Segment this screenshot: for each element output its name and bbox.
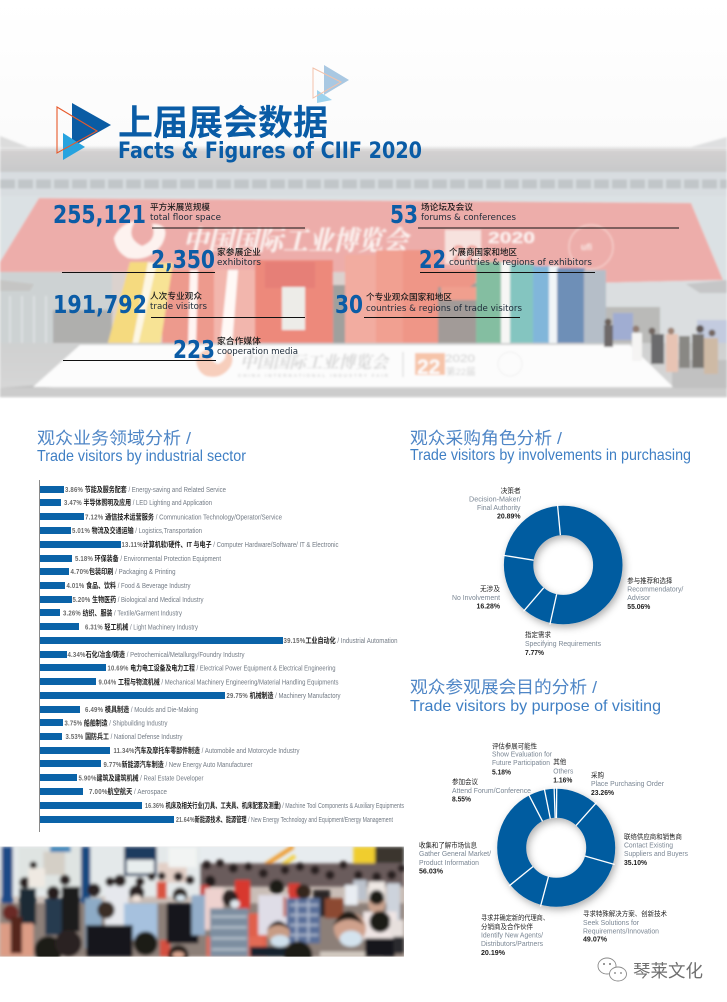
heading: involvements in purchasing: 观众采购角色分析 /: [410, 429, 562, 448]
bar: light machinery: [40, 622, 198, 632]
bar: LED: 3.47% 半导体照明及应用 / LED Lighting and Application: [64, 497, 212, 507]
title: 上届展会数据: [118, 104, 328, 143]
bar: food: 4.01% 食品、饮料 / Food & Beverage Industry: [66, 580, 191, 590]
label: contact suppliers: [624, 832, 688, 867]
stat: forums and conferences: forums & conferences: [421, 213, 517, 223]
lower walls: [0, 272, 112, 348]
label: decision maker: [469, 486, 522, 521]
label: identify new agents: Identify New Agents/: [481, 931, 544, 940]
label: gather market information: Gather General Market/: [419, 849, 492, 858]
label: seek solutions: Seek Solutions for: [583, 918, 639, 927]
platform: fair name and session mark: [196, 348, 522, 379]
label: gather market information: [419, 840, 492, 875]
label: gather market information: 56.03%: [419, 866, 444, 875]
stat: total floor space: 255,121: [53, 200, 146, 229]
bar: logistics: [40, 525, 202, 535]
label: show evaluation: Show Evaluation for: [492, 750, 552, 758]
heading: involvements in purchasing: Trade visitors by involvements in purchasing: [410, 447, 691, 464]
label: recommendatory: [627, 576, 684, 611]
foreground dark people: [34, 936, 62, 964]
stat: countries of trade visitors: [335, 290, 523, 319]
label: show evaluation: Future Participation: [492, 758, 550, 767]
bar: automobile: 11.34%汽车及摩托车零部件制造 / Automobile and Motorcycle Industry: [114, 745, 300, 755]
bar: electrical power: [40, 662, 336, 672]
stat: cooperation media: [63, 335, 298, 364]
label: identify new agents: [481, 913, 549, 957]
stat: exhibitors: [62, 245, 262, 274]
label: attend forum: 参加会议: [452, 777, 478, 786]
big CIIF letterforms: [162, 250, 490, 347]
platform: fair name and session mark: CHINA INTERNATIONAL INDUSTRY FAIR: [238, 373, 389, 379]
stat: exhibitors: exhibitors: [217, 258, 262, 268]
label: decision maker: 20.89%: [497, 512, 521, 521]
heading: purpose of visiting: Trade visitors by purpose of visiting: [410, 698, 661, 715]
label: place purchasing order: Place Purchasing Order: [591, 779, 664, 788]
label: place purchasing order: 23.26%: [591, 788, 615, 797]
bar: packaging: 4.70%包装印刷 / Packaging & Printing: [70, 566, 176, 576]
visitors at the entrance: [604, 318, 718, 374]
bar: packaging: [40, 566, 176, 576]
label: contact suppliers: Contact Existing: [624, 840, 673, 849]
bar: electrical power: 10.69% 电力电工设备及电力工程 / Electrical Power Equipment & Electrical Engineering: [108, 662, 336, 672]
stat: countries of trade visitors: countries & regions of trade visitors: [366, 304, 523, 314]
bar: energy saving: 3.86% 节能及服务配套 / Energy-saving and Related Service: [65, 484, 226, 494]
label: specifying requirements: 7.77%: [525, 648, 545, 657]
label: show evaluation: [492, 741, 552, 776]
label: contact suppliers: 35.10%: [624, 858, 648, 867]
bar: automobile: [40, 745, 300, 755]
bar: shipbuilding: [40, 718, 168, 728]
bar: machine tool: 16.36% 机床及相关行业(刀具、工夹具、机床配套及测量) / Machine Tool Components & Auxiliary Equipments: [145, 800, 404, 810]
stat: countries of exhibitors: countries & regions of exhibitors: [449, 258, 593, 268]
stat: cooperation media: 家合作媒体: [217, 335, 261, 346]
label: recommendatory: Recommendatory/: [627, 585, 684, 594]
bar: new energy auto: 9.77%新能源汽车制造 / New Energy Auto Manufacturer: [104, 759, 253, 769]
photo: crowd of visitors: [0, 846, 404, 957]
bar: mechanical: [40, 676, 339, 686]
bar: textile: 3.26% 纺织、服装 / Textile/Garment Industry: [63, 608, 182, 618]
label: identify new agents: 分销商及合作伙伴: [481, 922, 533, 931]
bar: real estate: [40, 772, 204, 782]
label: recommendatory: Advisor: [627, 593, 651, 602]
bar: new energy auto: [40, 759, 253, 769]
label: seek solutions: 49.07%: [583, 935, 608, 944]
bar: petrochemical: 4.34%石化/冶金/铸造 / Petrochemical/Metallurgy/Foundry Industry: [68, 649, 245, 659]
banner: 2020 session mark: ufi: [581, 242, 592, 252]
stat: total floor space: 平方米展览规模: [150, 201, 210, 212]
label: attend forum: [452, 777, 531, 804]
bar: moulds: 6.49% 模具制造 / Moulds and Die-Making: [85, 704, 198, 714]
bar: biological: 5.20% 生物医药 / Biological and Medical Industry: [72, 594, 204, 604]
bar: industrial automation: [40, 635, 398, 645]
label: seek solutions: [583, 909, 667, 944]
books: yellow and white: [107, 262, 173, 346]
stat: trade visitors: 人次专业观众: [150, 290, 202, 301]
bar: communication: 7.12% 通信技术运营服务 / Communication Technology/Operator/Service: [85, 511, 282, 521]
label: no involvement: [452, 584, 501, 610]
bar: machinery manufactory: 29.75% 机械制造 / Machinery Manufactory: [226, 690, 341, 700]
mid-ground people: [19, 888, 36, 925]
heading: industrial sector: 观众业务领域分析 /: [37, 429, 191, 448]
label: others: [553, 757, 573, 784]
bar: computer: [40, 539, 339, 549]
label: identify new agents: 寻求并确定新的代理商、: [481, 913, 549, 922]
platform: fair name and session mark: 第22届: [446, 366, 476, 378]
label: seek solutions: Requirements/Innovation: [583, 926, 659, 935]
stat: countries of trade visitors: 个专业观众国家和地区: [366, 291, 452, 302]
label: gather market information: Product Information: [419, 858, 479, 867]
bar: light machinery: 6.31% 轻工机械 / Light Machinery Industry: [85, 622, 198, 632]
bar: textile: [40, 608, 182, 618]
left foreground woman: [0, 923, 33, 957]
donut chart: purchasing roles: [503, 504, 608, 625]
stat: forums and conferences: 场论坛及会议: [421, 201, 473, 212]
banner: 2020 session mark: 22: [452, 241, 479, 268]
bar: logistics: 5.01% 物流及交通运输 / Logistics,Transportation: [72, 525, 202, 535]
bar: food: [40, 580, 191, 590]
bar: new energy technology: 21.64%新能源技术、能源管理 / New Energy Technology and Equipment/Energy Management: [176, 814, 394, 824]
bar: energy saving: [40, 484, 226, 494]
heading: involvements in purchasing: [410, 429, 691, 464]
heading: purpose of visiting: 观众参观展会目的分析 /: [410, 678, 597, 697]
label: decision maker: Final Authority: [477, 503, 521, 512]
platform: fair name and session mark: 22: [417, 356, 440, 379]
banner: 2020 session mark: [445, 225, 613, 269]
bar: communication: [40, 511, 282, 521]
logo mark: triangles: [57, 103, 111, 160]
bar: mechanical: 9.04% 工程与物流机械 / Mechanical Machinery Engineering/Material Handling Equipments: [98, 676, 339, 686]
label: specifying requirements: [525, 630, 601, 657]
donut chart: visiting purposes: [509, 787, 615, 907]
label: no involvement: 16.28%: [476, 601, 501, 610]
title: Facts & Figures of CIIF 2020: [118, 139, 422, 164]
bar chart: industrial sector: [40, 480, 404, 832]
decorative logo mark: faded triangles: [313, 65, 349, 103]
banner: swirl logo and white fair name: 中国国际工业博览会: [183, 219, 412, 258]
bar: industrial automation: 39.15%工业自动化 / Industrial Automation: [284, 635, 398, 645]
bar: machinery manufactory: [40, 690, 341, 700]
bar: aerospace: [40, 786, 167, 796]
background heads row: [19, 859, 406, 888]
label: others: 1.16%: [553, 775, 573, 784]
label: show evaluation: 评估参展可能性: [492, 741, 537, 750]
platform: fair name and session mark: 2020: [445, 353, 475, 365]
label: recommendatory: 55.06%: [627, 602, 651, 611]
stat: countries of exhibitors: 个展商国家和地区: [449, 246, 517, 257]
books: green and blue: [476, 262, 606, 346]
label: no involvement: 无涉及: [480, 584, 500, 593]
bar: real estate: 5.90%建筑及建筑机械 / Real Estate Developer: [78, 772, 204, 782]
bar: national defense: [40, 731, 183, 741]
banner: 2020 session mark: 2020: [488, 230, 535, 247]
label: show evaluation: 5.18%: [492, 767, 512, 776]
heading: industrial sector: [37, 429, 247, 465]
stat: cooperation media: 223: [173, 335, 215, 364]
checked shirt pattern: [212, 900, 318, 949]
bar: national defense: 3.53% 国防兵工 / National Defense Industry: [66, 731, 183, 741]
label: gather market information: 收集和了解市场信息: [419, 840, 477, 849]
label: place purchasing order: 采购: [591, 771, 604, 780]
label: decision maker: Decision-Maker/: [469, 495, 522, 504]
label: seek solutions: 寻求特殊解决方案、创新技术: [583, 909, 667, 918]
stat: cooperation media: cooperation media: [217, 347, 298, 357]
stat: forums and conferences: [390, 200, 679, 229]
bar: environmental: 5.18% 环保装备 / Environmental Protection Equipment: [75, 553, 222, 563]
bar: environmental: [40, 553, 222, 563]
stat: countries of exhibitors: 22: [419, 245, 446, 274]
stat: exhibitors: 2,350: [151, 245, 215, 274]
stat: total floor space: total floor space: [150, 213, 221, 223]
title: [118, 104, 422, 164]
label: recommendatory: 参与推荐和选择: [627, 576, 673, 585]
bar: computer: 13.11%计算机软/硬件、IT 与电子 / Computer Hardware/Software/ IT & Electronic: [122, 539, 339, 549]
label: others: Others: [553, 766, 573, 775]
bar: machine tool: [40, 800, 404, 810]
heading: purpose of visiting: [410, 678, 661, 715]
bar: LED: [40, 497, 212, 507]
label: no involvement: No Involvement: [452, 593, 501, 602]
stat: trade visitors: trade visitors: [150, 302, 208, 312]
label: specifying requirements: Specifying Requirements: [525, 639, 601, 648]
label: decision maker: 决策者: [501, 486, 521, 495]
bar: shipbuilding: 3.75% 船舶制造 / Shipbuilding Industry: [64, 718, 168, 728]
bar: biological: [40, 594, 204, 604]
label: contact suppliers: Suppliers and Buyers: [624, 849, 688, 858]
bar: petrochemical: [40, 649, 245, 659]
label: attend forum: 8.55%: [452, 795, 472, 804]
platform: fair name and session mark: 中国国际工业博览会: [240, 348, 390, 373]
bar: aerospace: 7.00%航空航天 / Aerospace: [89, 786, 167, 796]
stat: trade visitors: 191,792: [53, 290, 147, 319]
bar: new energy technology: [40, 814, 394, 824]
stat: trade visitors: [53, 290, 305, 319]
watermark: wechat icon and account name: 琴莱文化: [633, 961, 703, 981]
stat: forums and conferences: 53: [390, 200, 418, 229]
label: identify new agents: 20.19%: [481, 948, 506, 957]
watermark: wechat icon and account name: [598, 958, 703, 981]
label: contact suppliers: 联络供应商和销售商: [624, 832, 682, 841]
heading: industrial sector: Trade visitors by industrial sector: [37, 448, 247, 465]
label: identify new agents: Distributors/Partners: [481, 939, 543, 948]
label: place purchasing order: [591, 771, 664, 797]
stat: countries of trade visitors: 30: [335, 290, 363, 319]
hero photo: exhibition hall facade: [0, 0, 727, 397]
stat: exhibitors: 家参展企业: [217, 246, 261, 257]
label: specifying requirements: 指定需求: [525, 630, 551, 639]
stat: total floor space: [53, 200, 305, 229]
label: others: 其他: [553, 757, 567, 766]
stat: countries of exhibitors: [419, 245, 595, 274]
bar: moulds: [40, 704, 198, 714]
label: attend forum: Attend Forum/Conference: [452, 786, 531, 795]
